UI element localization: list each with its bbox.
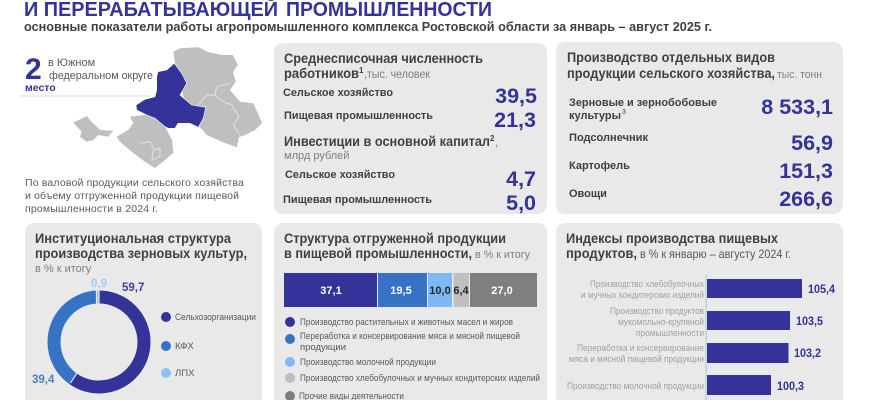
row: agriculture employees: Сельское хозяйство bbox=[283, 87, 393, 99]
row: grain: 3 bbox=[622, 109, 626, 116]
row: agriculture employees: 39,5 bbox=[495, 84, 537, 108]
heading: employees: 1 bbox=[359, 66, 364, 75]
heading: производства зерновых культур, bbox=[35, 245, 247, 261]
horizontal bar chart: Производство продуктов bbox=[610, 306, 704, 316]
donut labels: 0,9 bbox=[91, 278, 107, 290]
heading: в пищевой промышленности, bbox=[284, 245, 472, 261]
heading: тыс. тонн bbox=[777, 69, 822, 81]
panel: employees and investments bbox=[274, 43, 547, 215]
heading: Индексы производства пищевых bbox=[566, 230, 778, 246]
row: sunflower: 56,9 bbox=[791, 131, 833, 155]
row: grain: 8 533,1 bbox=[761, 95, 833, 119]
row: grain: Зерновые и зернобобовые bbox=[569, 97, 717, 109]
bar legend: Производство хлебобулочных и мучных кондитерских изделий bbox=[300, 373, 540, 384]
rank description: в Южном bbox=[48, 57, 95, 69]
panel: food production indices bbox=[556, 223, 843, 400]
heading: investments: Инвестиции в основной капитал bbox=[284, 133, 490, 149]
row: food industry investments: 5,0 bbox=[506, 191, 536, 215]
horizontal bar chart: мукомольно-крупяной bbox=[618, 317, 704, 327]
heading bbox=[35, 230, 247, 275]
heading bbox=[567, 49, 822, 81]
row: food industry employees: 21,3 bbox=[494, 108, 536, 132]
bar legend: Переработка и консервирование мяса и мясной пищевой bbox=[300, 331, 520, 342]
heading: продуктов, bbox=[566, 245, 637, 261]
title bbox=[24, 0, 492, 21]
heading: investments: 2 bbox=[490, 134, 495, 143]
horizontal bar chart: промышленности bbox=[636, 328, 704, 338]
row: agriculture investments: Сельское хозяйство bbox=[285, 169, 395, 181]
row: potatoes: Картофель bbox=[569, 160, 630, 172]
row: potatoes: 151,3 bbox=[779, 159, 833, 183]
row: sunflower bbox=[569, 131, 833, 155]
heading: employees: работников bbox=[284, 65, 359, 81]
stacked bar chart: 27,0 bbox=[491, 285, 513, 297]
heading: Структура отгруженной продукции bbox=[284, 230, 506, 246]
rank description: федеральном округе bbox=[49, 70, 153, 82]
note about ranking bbox=[25, 177, 244, 215]
note about ranking: По валовой продукции сельского хозяйства bbox=[25, 177, 244, 189]
heading: investments bbox=[284, 133, 498, 162]
note about ranking: промышленности в 2024 г. bbox=[25, 203, 158, 215]
heading: investments: , bbox=[495, 135, 498, 149]
rank label: место bbox=[25, 82, 56, 94]
horizontal bar chart: Производство молочной продукции bbox=[567, 381, 704, 391]
donut legend: ЛПХ bbox=[175, 368, 195, 379]
row: vegetables: Овощи bbox=[569, 188, 607, 200]
note about ranking: и объему отгруженной продукции пищевой bbox=[25, 190, 239, 202]
heading: investments: млрд рублей bbox=[284, 150, 349, 162]
bar legend: продукции bbox=[300, 342, 346, 353]
bar legend: Производство молочной продукции bbox=[300, 357, 436, 368]
bar legend bbox=[285, 317, 540, 400]
heading bbox=[284, 230, 530, 261]
heading: employees: Среднесписочная численность bbox=[284, 50, 483, 66]
horizontal bar chart: Производство хлебобулочных bbox=[590, 279, 704, 289]
heading: продукции сельского хозяйства, bbox=[567, 65, 775, 81]
panel: agricultural production bbox=[556, 42, 843, 214]
stacked bar chart: 37,1 bbox=[320, 285, 342, 297]
heading: employees: ,тыс. человек bbox=[364, 67, 431, 81]
donut chart bbox=[54, 297, 144, 387]
heading bbox=[566, 230, 791, 261]
heading: employees bbox=[284, 50, 483, 81]
heading: Институциональная структура bbox=[35, 230, 231, 246]
horizontal bar chart: и мучных кондитерских изделий bbox=[581, 290, 704, 300]
panel: food shipment structure bbox=[274, 223, 547, 400]
donut separators bbox=[70, 290, 99, 383]
horizontal bar chart: 100,3 bbox=[777, 379, 804, 393]
horizontal bar chart bbox=[567, 275, 835, 400]
horizontal bar chart: Переработка и консервирование bbox=[577, 343, 704, 353]
row: food industry investments: Пищевая промышленность bbox=[283, 194, 432, 206]
donut legend: Сельхозорганизации bbox=[175, 312, 256, 323]
row: sunflower: Подсолнечник bbox=[569, 132, 648, 144]
row: agriculture employees bbox=[283, 84, 537, 108]
stacked bar chart: 19,5 bbox=[390, 285, 412, 297]
row: food industry employees: Пищевая промышленность bbox=[284, 110, 433, 122]
row: grain: культуры bbox=[569, 110, 621, 122]
donut legend: КФХ bbox=[175, 341, 194, 352]
horizontal bar chart: мяса и мясной пищевой продукции bbox=[569, 354, 704, 364]
subtitle: основные показатели работы агропромышленного комплекса Ростовской области за январь – август 2025 г. bbox=[24, 19, 712, 34]
heading: в % к итогу bbox=[35, 263, 92, 275]
row: food industry employees bbox=[284, 108, 536, 132]
heading: в % к итогу bbox=[475, 249, 530, 261]
donut labels: 39,4 bbox=[32, 374, 55, 386]
rank number: 2 bbox=[25, 53, 42, 86]
stacked bar chart: 10,0 bbox=[429, 285, 451, 297]
row: agriculture investments: 4,7 bbox=[506, 167, 536, 191]
row: vegetables: 266,6 bbox=[779, 187, 833, 211]
panel: region rank and map bbox=[20, 47, 262, 215]
row: agriculture investments bbox=[285, 167, 536, 191]
horizontal bar chart: 103,2 bbox=[794, 346, 821, 360]
panel: grain structure bbox=[25, 223, 262, 400]
map of the Southern Federal District bbox=[73, 47, 262, 168]
stacked bar chart bbox=[284, 273, 537, 307]
horizontal bar chart: 105,4 bbox=[808, 282, 835, 296]
heading: Производство отдельных видов bbox=[567, 49, 775, 65]
row: potatoes bbox=[569, 159, 833, 183]
row: food industry investments bbox=[283, 191, 536, 215]
row: grain bbox=[569, 95, 833, 122]
bar legend: Производство растительных и животных масел и жиров bbox=[300, 317, 513, 328]
donut labels: 59,7 bbox=[122, 282, 144, 294]
rank description bbox=[48, 57, 153, 82]
donut labels bbox=[32, 278, 144, 386]
row: vegetables bbox=[569, 187, 833, 211]
heading: в % к январю – августу 2024 г. bbox=[640, 247, 791, 261]
donut legend bbox=[161, 312, 256, 379]
stacked bar chart: 6,4 bbox=[453, 285, 470, 297]
horizontal bar chart: 103,5 bbox=[796, 314, 823, 328]
